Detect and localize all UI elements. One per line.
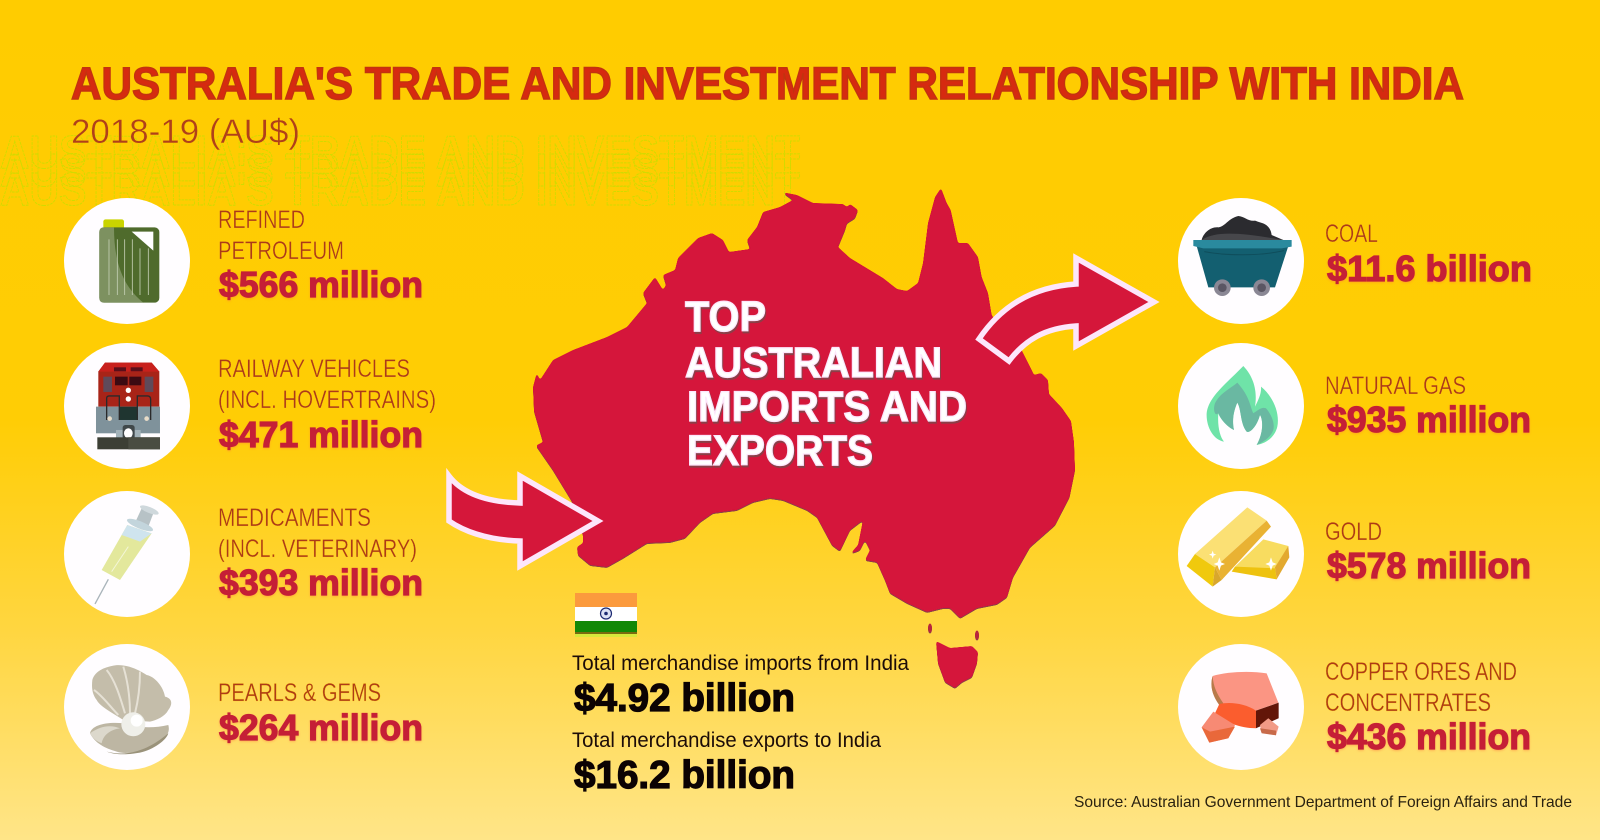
value: $578 million <box>1327 545 1531 586</box>
label: GOLD <box>1325 518 1382 546</box>
icon: coal cart <box>1178 198 1304 324</box>
icon: gold bars <box>1178 491 1304 617</box>
mainland <box>533 188 1075 618</box>
label: COPPER ORES AND <box>1325 658 1517 686</box>
imports total: $4.92 billion <box>574 677 795 720</box>
label: RAILWAY VEHICLES <box>218 355 410 383</box>
label: PEARLS & GEMS <box>218 679 381 707</box>
subtitle: 2018-19 (AU$) <box>71 113 300 151</box>
icon: green flame <box>1178 343 1304 469</box>
value: $935 million <box>1327 399 1531 440</box>
map heading <box>685 293 967 475</box>
label: MEDICAMENTS <box>218 504 371 532</box>
item: refined petroleum <box>64 198 423 324</box>
source note: Source: Australian Government Department of Foreign Affairs and Trade <box>1074 794 1572 811</box>
label <box>1325 658 1517 717</box>
infographic canvas: AUSTRALIA'S TRADE AND INVESTMENT <box>0 126 800 178</box>
item: railway vehicles <box>64 343 436 469</box>
label <box>218 355 436 414</box>
icon: pearl shell <box>64 644 190 770</box>
imports caption: Total merchandise imports from India <box>572 652 909 675</box>
infographic canvas: AUSTRALIA'S TRADE AND INVESTMENT <box>0 163 800 215</box>
icon: India flag <box>575 593 637 637</box>
map heading: TOP <box>685 293 766 341</box>
label <box>218 504 417 563</box>
value: $436 million <box>1327 716 1531 757</box>
label: NATURAL GAS <box>1325 372 1466 400</box>
item: coal <box>1178 198 1532 324</box>
map of Australia <box>533 188 1075 688</box>
value: $471 million <box>219 414 423 455</box>
item: gold <box>1178 491 1531 617</box>
item: copper ores <box>1178 644 1531 770</box>
label <box>218 206 344 265</box>
exports total: $16.2 billion <box>574 754 795 797</box>
title: AUSTRALIA'S TRADE AND INVESTMENT RELATIONSHIP WITH INDIA <box>71 58 1464 109</box>
infographic canvas: AUSTRALIA'S TRADE AND INVESTMENT <box>0 144 800 196</box>
value: $11.6 billion <box>1327 248 1532 289</box>
import arrow <box>449 476 598 566</box>
label: PETROLEUM <box>218 237 344 265</box>
value: $264 million <box>219 707 423 748</box>
Tasmania <box>936 641 978 688</box>
icon: locomotive <box>64 343 190 469</box>
item: pearls and gems <box>64 644 423 770</box>
label: REFINED <box>218 206 305 234</box>
map heading: EXPORTS <box>687 427 873 475</box>
value: $566 million <box>219 264 423 305</box>
map heading: AUSTRALIAN <box>685 339 942 387</box>
label: CONCENTRATES <box>1325 689 1491 717</box>
icon: jerry can <box>64 198 190 324</box>
Bass Strait islands <box>928 624 979 640</box>
export arrow <box>979 258 1154 361</box>
icon: syringe <box>64 491 190 617</box>
item: medicaments <box>64 491 423 617</box>
exports caption: Total merchandise exports to India <box>572 729 881 752</box>
label: (INCL. HOVERTRAINS) <box>218 386 436 414</box>
label: (INCL. VETERINARY) <box>218 535 417 563</box>
value: $393 million <box>219 562 423 603</box>
map heading: IMPORTS AND <box>687 383 967 431</box>
icon: copper ore <box>1178 644 1304 770</box>
item: natural gas <box>1178 343 1531 469</box>
label: COAL <box>1325 220 1378 248</box>
